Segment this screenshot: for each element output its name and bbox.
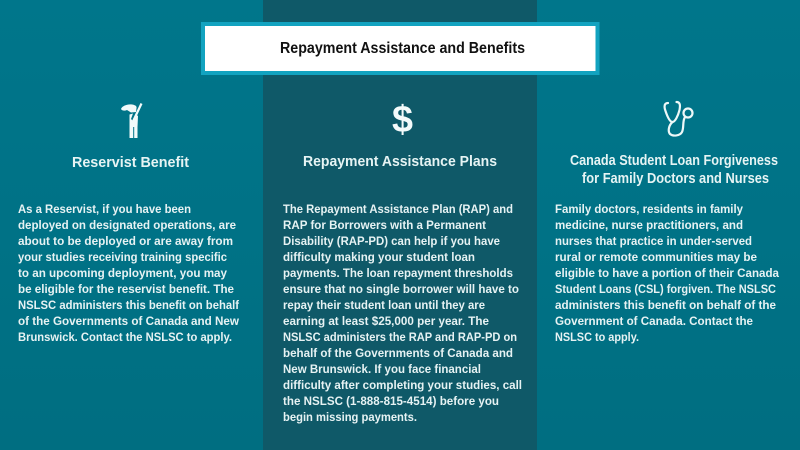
body text: canada student loan forgiveness: [555, 202, 779, 344]
body text: canada student loan forgiveness: administers this benefit on behalf of the: [555, 298, 776, 312]
panel: reservist benefit: [18, 103, 240, 344]
body text: repayment assistance plans: behalf of the Governments of Canada and: [283, 346, 513, 360]
body text: repayment assistance plans: New Brunswick. If you face financial: [283, 362, 481, 376]
body text: repayment assistance plans: begin missing payments.: [283, 410, 417, 424]
body text: reservist benefit: NSLSC administers this benefit on behalf: [18, 298, 240, 312]
panel: canada student loan forgiveness: [555, 102, 779, 344]
body text: canada student loan forgiveness: NSLSC to apply.: [555, 330, 639, 344]
body text: repayment assistance plans: The Repayment Assistance Plan (RAP) and: [283, 202, 513, 216]
body text: canada student loan forgiveness: rural or remote communities may be: [555, 250, 757, 264]
icon: stethoscope: [665, 102, 692, 136]
heading: canada student loan forgiveness for family doctors and nurses: for Family Doctors and Nurses: [582, 170, 769, 187]
panel: repayment assistance plans: [283, 99, 522, 424]
body text: repayment assistance plans: [283, 202, 522, 424]
body text: reservist benefit: As a Reservist, if you have been: [18, 202, 191, 216]
body text: repayment assistance plans: payments. The loan repayment thresholds: [283, 266, 513, 280]
body text: repayment assistance plans: NSLSC administers the RAP and RAP-PD on: [283, 330, 517, 344]
body text: reservist benefit: of the Governments of Canada and New: [18, 314, 240, 328]
body text: canada student loan forgiveness: eligible to have a portion of their Canada: [555, 266, 779, 280]
body text: repayment assistance plans: ensure that no single borrower will have to: [283, 282, 519, 296]
panel: repayment assistance plans background: [263, 0, 537, 450]
heading: canada student loan forgiveness for family doctors and nurses: [570, 152, 778, 187]
icon: dollar sign: $: [392, 99, 413, 141]
body text: reservist benefit: to an upcoming deployment, you may: [18, 266, 227, 280]
body text: canada student loan forgiveness: Government of Canada. Contact the: [555, 314, 753, 328]
body text: reservist benefit: deployed on designated operations, are: [18, 218, 236, 232]
title banner: Repayment Assistance and Benefits: [280, 40, 525, 57]
body text: reservist benefit: be eligible for the reservist benefit. The: [18, 282, 234, 296]
body text: repayment assistance plans: the NSLSC (1-888-815-4514) before you: [283, 394, 499, 408]
body text: canada student loan forgiveness: Student Loans (CSL) forgiven. The NSLSC: [555, 282, 776, 296]
heading: repayment assistance plans: Repayment Assistance Plans: [303, 153, 497, 170]
body text: repayment assistance plans: difficulty making your student loan: [283, 250, 475, 264]
icon: saluting soldier: [121, 103, 142, 138]
body text: repayment assistance plans: RAP for Borrowers with a Permanent: [283, 218, 486, 232]
body text: canada student loan forgiveness: nurses that practice in under-served: [555, 234, 752, 248]
body text: canada student loan forgiveness: Family doctors, residents in family: [555, 202, 743, 216]
heading: reservist benefit: Reservist Benefit: [72, 154, 189, 171]
body text: canada student loan forgiveness: medicine, nurse practitioners, and: [555, 218, 743, 232]
body text: reservist benefit: about to be deployed or are away from: [18, 234, 233, 248]
body text: reservist benefit: [18, 202, 240, 344]
body text: repayment assistance plans: difficulty after completing your studies, call: [283, 378, 522, 392]
title banner: [203, 24, 598, 73]
body text: repayment assistance plans: earning at least $25,000 per year. The: [283, 314, 489, 328]
body text: repayment assistance plans: repay their student loan until they are: [283, 298, 485, 312]
body text: repayment assistance plans: Disability (RAP-PD) can help if you have: [283, 234, 500, 248]
body text: reservist benefit: Brunswick. Contact the NSLSC to apply.: [18, 330, 232, 344]
body text: reservist benefit: your studies receiving training specific: [18, 250, 227, 264]
